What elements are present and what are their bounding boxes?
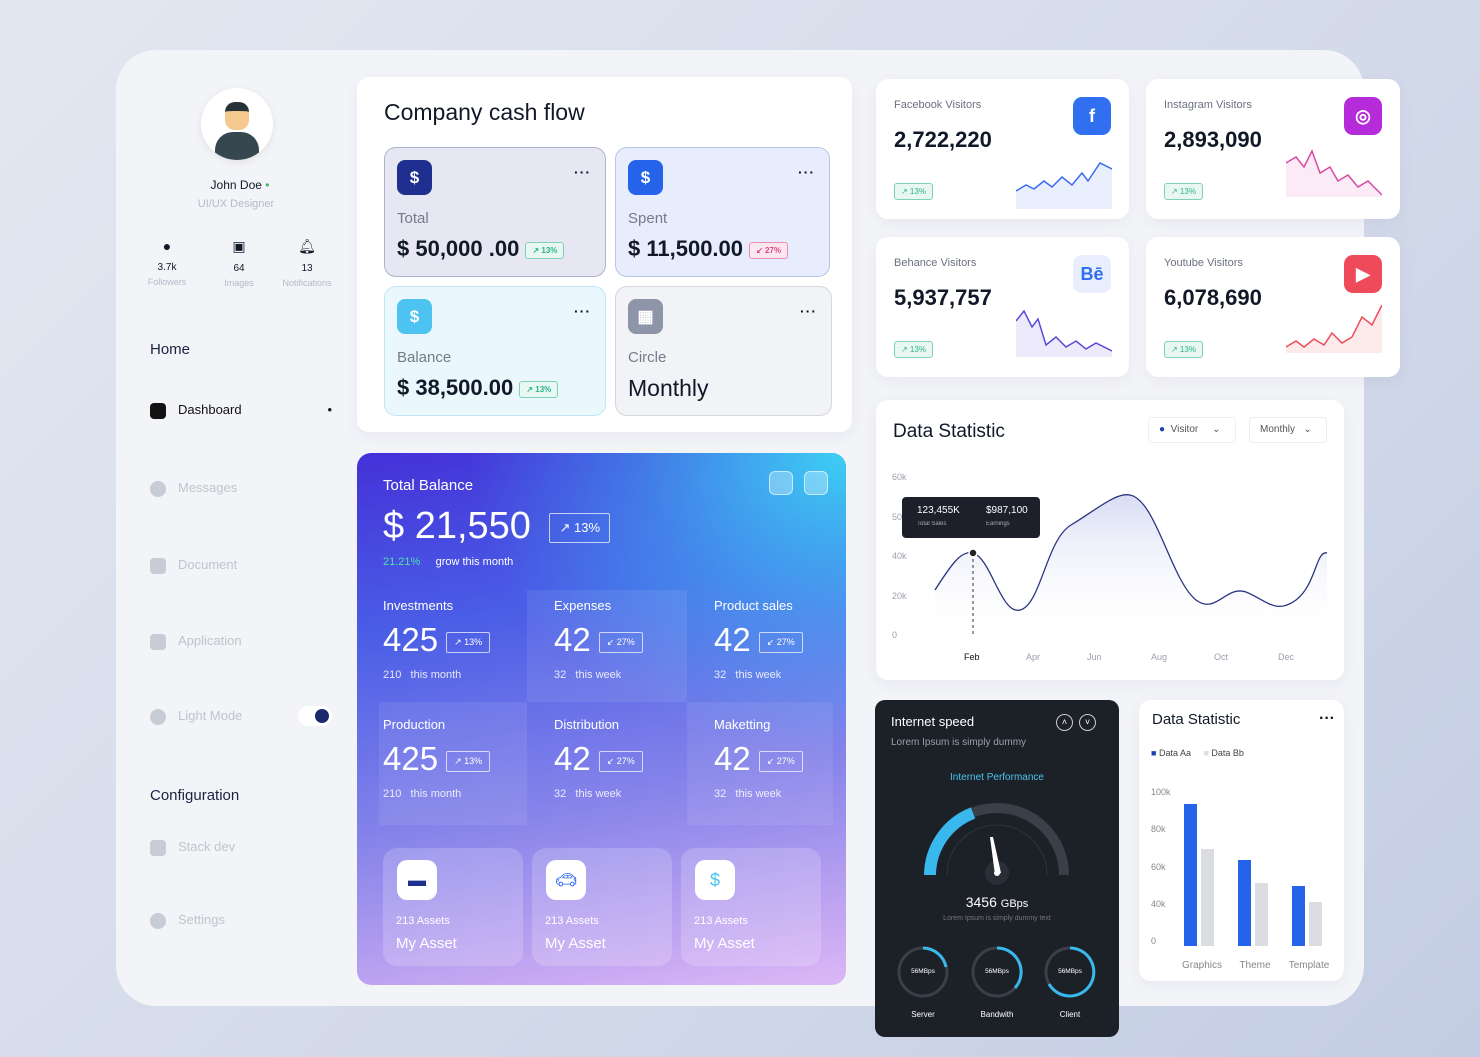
stat: production: 425 [383,740,438,777]
card: balance: ↗ 13% [526,385,551,394]
view icons [769,471,793,495]
card: spent [615,147,830,277]
social: youtube: 6,078,690 [1164,285,1262,310]
line chart: 20k [892,591,907,601]
stat: maketting: ↙ 27% [767,756,795,766]
bar chart: 100k [1151,787,1171,797]
nav: document: Document [178,557,237,572]
sidebar profile [148,88,332,288]
asset card 2: My Asset [545,935,606,952]
asset card 2: 🚗︎ [555,870,577,890]
asset card 3 [681,848,821,966]
bar chart [1151,787,1330,971]
stat: maketting: 42 [714,740,751,777]
line chart: Jun [1087,652,1102,662]
dropdown: monthly: Monthly ⌄ [1260,424,1312,435]
card: total: ··· [574,164,591,180]
heading: Total Balance [383,477,473,494]
bar chart: 80k [1151,824,1166,834]
panel: internet speed: ˅ [1085,717,1090,727]
panel: company cash flow [357,77,852,432]
asset card 3: 213 Assets [694,915,748,927]
heading: Data Statistic [1152,711,1240,728]
social: facebook [876,79,1129,219]
big value: ↗ 13% [559,520,600,535]
stat: expenses: 32 this week [554,669,621,681]
asset card 3: My Asset [694,935,755,952]
stat: product sales: ↙ 27% [767,637,795,647]
stat: expenses: ↙ 27% [607,637,635,647]
stat: maketting: 32 this week [714,788,781,800]
social: instagram [1146,79,1400,219]
line chart: Aug [1151,652,1167,662]
bar chart: Theme [1239,960,1271,971]
stat: product sales: Product sales [714,598,793,613]
speed value: 3456 GBps [966,894,1028,910]
nav: document [150,557,238,574]
stat: distribution: 32 this week [554,788,621,800]
card: balance [384,286,606,416]
sidebar profile: 🔔︎ [298,238,316,254]
card: total: ↗ 13% [532,246,557,255]
sidebar profile: ▣ [232,238,246,254]
rings [898,946,1096,1019]
big value [383,505,610,547]
dropdown: visitor: ● Visitor ⌄ [1159,424,1220,435]
rings: Server [911,1010,935,1019]
social: facebook: 2,722,220 [894,127,992,152]
stat: production [383,717,490,800]
panel: data statistic bar chart [1139,700,1344,981]
asset card 1: 213 Assets [396,915,450,927]
card: balance: Balance [397,349,451,366]
social: facebook: Facebook Visitors [894,99,981,111]
sidebar profile: 13 [301,263,313,274]
social: behance: Bē [1080,264,1104,284]
nav: settings [150,912,225,929]
bar chart: Graphics [1182,960,1222,971]
line chart: 60k [892,472,907,482]
rings: 56MBps [985,968,1010,975]
line chart: 50 [892,512,902,522]
card: circle: Circle [628,349,666,366]
rings: 56MBps [911,968,936,975]
nav: application [150,633,242,650]
tooltip: 123,455K [917,505,960,516]
card: spent: ··· [798,164,815,180]
card: total [384,147,606,277]
rings: Client [1060,1010,1081,1019]
social: behance: ↗ 13% [901,345,926,354]
stat: production: 210 this month [383,788,461,800]
nav: application: Application [178,633,242,648]
stat: investments: Investments [383,598,453,613]
stat: maketting: Maketting [714,717,770,732]
dropdown: monthly [1249,417,1327,443]
social: facebook: f [1089,106,1095,126]
rings: 56MBps [1058,968,1083,975]
card: spent: ↙ 27% [756,246,781,255]
social: behance: Behance Visitors [894,257,976,269]
rings: Bandwith [981,1010,1013,1019]
social: instagram: ◎ [1355,106,1371,126]
bar chart: 0 [1151,936,1156,946]
line chart [892,472,1328,662]
stat: maketting [714,717,803,800]
sidebar profile: ● [163,238,171,254]
social: facebook: ↗ 13% [901,187,926,196]
nav: dashboard: Dashboard [178,402,242,417]
stat: investments: 425 [383,621,438,658]
card: balance: ··· [574,303,591,319]
panel: internet speed: Lorem Ipsum is simply dummy [891,737,1026,748]
subheading: Internet Performance [950,772,1044,783]
stat: investments: 210 this month [383,669,461,681]
nav: messages: Messages [178,480,237,495]
asset card 2 [532,848,672,966]
bar chart: 40k [1151,899,1166,909]
asset card 3: $ [710,870,720,890]
card: circle: Monthly [628,375,709,401]
line chart: 0 [892,630,897,640]
nav: messages [150,480,237,497]
card: balance: $ 38,500.00 [397,375,513,400]
tooltip: Earnings [986,521,1010,527]
heading: Data Statistic [893,421,1005,442]
big value: $ 21,550 [383,505,531,547]
sidebar profile: 3.7k [158,262,176,273]
bar chart: Template [1289,960,1330,971]
sidebar profile: Followers [148,277,186,287]
stat: product sales [714,598,803,681]
heading: Internet speed [891,714,974,729]
social: behance: 5,937,757 [894,285,992,310]
nav: stack dev [150,839,235,856]
card: spent: Spent [628,210,667,227]
stat: expenses: 42 [554,621,591,658]
card: circle: ··· [800,303,817,319]
social: instagram: Instagram Visitors [1164,99,1252,111]
nav: dashboard [150,402,332,419]
legend: ■ Data Aa ■ Data Bb [1151,748,1244,758]
tooltip [902,497,1040,538]
stat: expenses [554,598,643,681]
social: instagram: ↗ 13% [1171,187,1196,196]
stat: production: ↗ 13% [454,756,482,766]
card: circle [615,286,832,416]
asset card 1: My Asset [396,935,457,952]
grid cells [527,590,687,702]
stat: expenses: Expenses [554,598,611,613]
heading: Company cash flow [384,99,585,125]
social: instagram: 2,893,090 [1164,127,1262,152]
nav: stack dev: Stack dev [178,839,235,854]
stat: distribution [554,717,643,800]
panel: internet speed [875,700,1119,1037]
panel: internet speed: Lorem Ipsum is simply dummy text [943,915,1051,922]
arrows [1056,714,1073,731]
card: total: $ 50,000 .00 [397,236,519,261]
gauge [924,803,1069,885]
growth: 21.21% grow this month [383,556,513,568]
social: youtube: ↗ 13% [1171,345,1196,354]
sidebar profile: 64 [233,263,245,274]
tooltip: Total Sales [917,521,946,527]
stat: distribution: 42 [554,740,591,777]
stat: product sales: 42 [714,621,751,658]
line chart: 40k [892,551,907,561]
card: spent: $ 11,500.00 [628,236,743,261]
panel: total balance [357,453,846,985]
nav: dashboard: • [327,402,332,417]
nav heading: home: Home [150,341,190,358]
stat: investments: ↗ 13% [454,637,482,647]
name: John Doe • [211,178,269,192]
arrows: ˄ [1062,717,1067,727]
stat: distribution: Distribution [554,717,619,732]
stat: distribution: ↙ 27% [607,756,635,766]
nav heading: configuration: Configuration [150,787,239,804]
sidebar profile: Images [224,278,254,288]
bar chart: 60k [1151,862,1166,872]
card: total: $ [410,168,419,187]
asset card 1 [383,848,523,966]
stats [148,238,332,288]
asset card 1: ▬ [408,870,426,890]
social: behance [876,237,1129,377]
card: spent: $ [641,168,650,187]
card: circle: ▦ [637,307,654,326]
social: youtube: Youtube Visitors [1164,257,1243,269]
dropdown: visitor [1148,417,1236,443]
stat: production: Production [383,717,445,732]
line chart: Feb [964,652,980,662]
stat: investments [383,598,490,681]
icon: avatar [201,88,273,160]
tooltip: $987,100 [986,505,1028,516]
role: UI/UX Designer [198,198,274,210]
panel: data statistic line chart [876,400,1344,680]
asset card 2: 213 Assets [545,915,599,927]
line chart: Dec [1278,652,1295,662]
social: youtube: ▶ [1356,264,1370,284]
stat: product sales: 32 this week [714,669,781,681]
card: balance: $ [410,307,419,326]
nav: light mode [150,706,332,726]
sidebar profile: Notifications [282,278,332,288]
panel: data statistic bar chart: ··· [1319,710,1335,727]
nav: light mode: Light Mode [178,708,242,723]
line chart: Oct [1214,652,1229,662]
social: youtube [1146,237,1400,377]
main frame [116,50,1364,1006]
card: total: Total [397,210,429,227]
line chart: Apr [1026,652,1040,662]
nav: settings: Settings [178,912,225,927]
